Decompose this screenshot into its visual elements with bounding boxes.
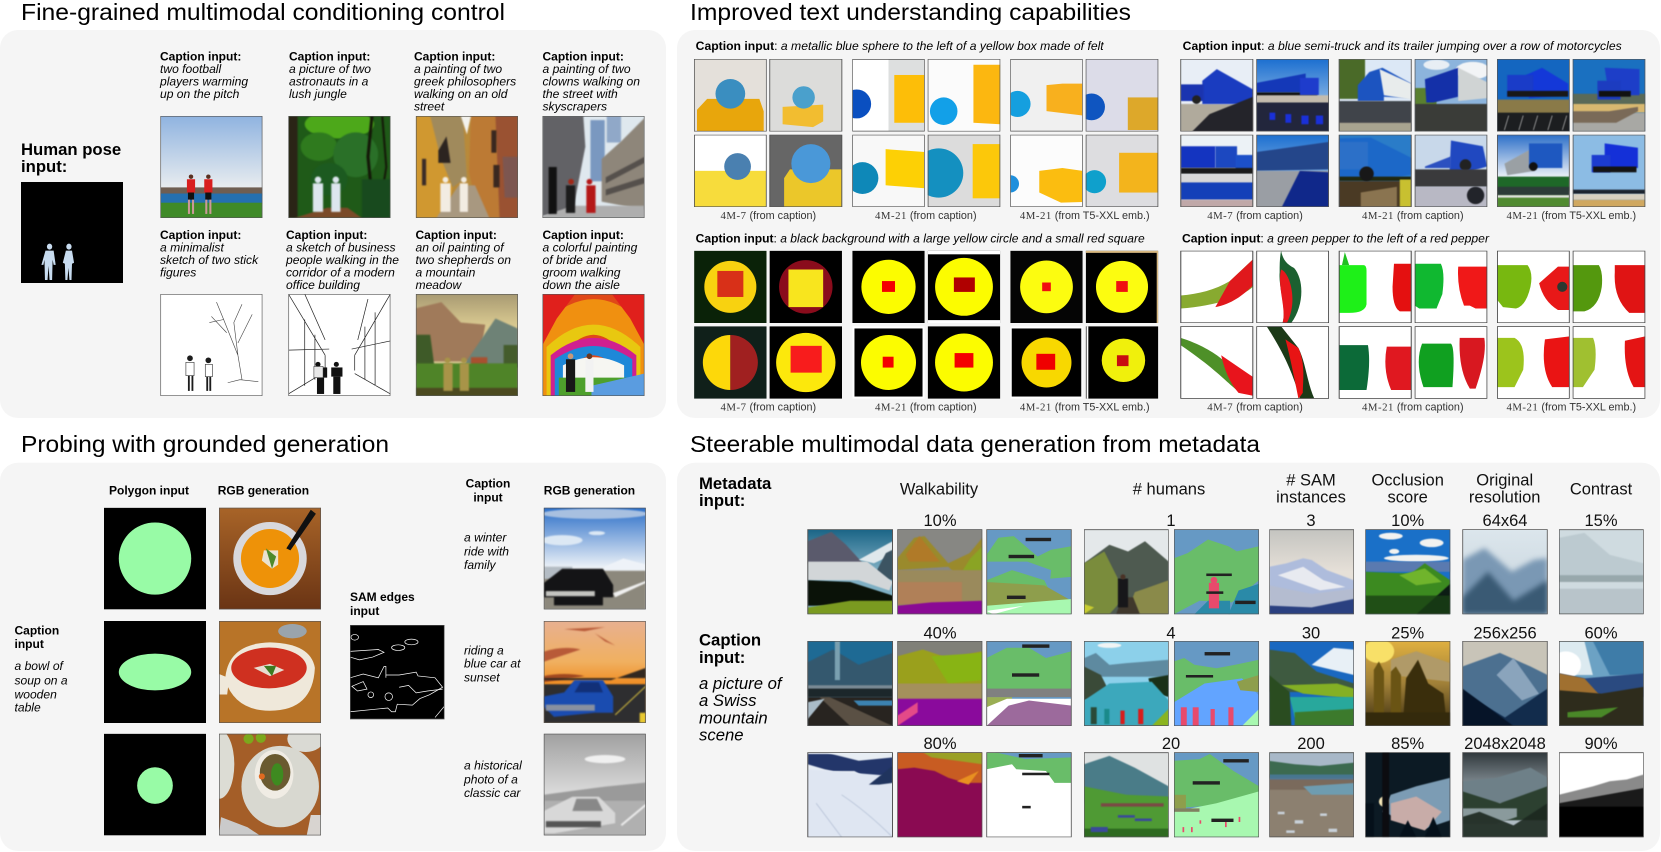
model labels, first row: 4M-21 (from T5-XXL emb.)	[1506, 210, 1636, 222]
heading: caption input right: Caption	[466, 477, 510, 491]
walkability 80% segmentation	[986, 752, 1072, 837]
column headers: Walkability	[900, 480, 979, 498]
caption text: riding at sunset: riding a	[464, 643, 504, 657]
values row 1: 15%	[1584, 512, 1618, 530]
circle image 12	[1086, 326, 1158, 399]
caption: shepherds: two shepherds on	[416, 253, 511, 267]
values row 3: 90%	[1584, 735, 1618, 753]
pepper image 3	[1339, 251, 1411, 323]
circle image 1	[694, 250, 766, 323]
sphere image 7	[694, 134, 767, 207]
title: steerable generation: Steerable multimodal data generation from metadata	[690, 431, 1261, 457]
sphere image 4	[928, 59, 1000, 132]
caption text: bowl of soup: soup on a	[14, 673, 68, 687]
sphere image 1	[694, 59, 767, 132]
caption text: Swiss mountain: mountain	[699, 708, 768, 727]
caption: clowns: skyscrapers	[542, 100, 607, 114]
caption: philosophers: a painting of two	[414, 62, 502, 76]
caption: astronauts: astronauts in a	[289, 74, 369, 88]
caption text: bowl of soup: wooden	[14, 687, 57, 701]
truck image 3	[1338, 59, 1412, 132]
truck image 11	[1497, 135, 1570, 207]
caption: football: up on the pitch	[160, 87, 240, 101]
caption text: Swiss mountain: scene	[699, 726, 744, 745]
caption: clowns: a painting of two	[542, 62, 631, 76]
caption: peppers: Caption input: a green pepper to the left of a red pepper	[1182, 232, 1490, 246]
column headers: resolution	[1469, 488, 1540, 506]
heading: SAM edges input: SAM edges	[350, 590, 415, 604]
walkability 80% normals	[897, 752, 982, 837]
caption: business people: a sketch of business	[286, 240, 396, 254]
values row 2	[923, 624, 1618, 642]
values row 2: 256x256	[1473, 624, 1537, 642]
truck image 8	[1256, 135, 1329, 207]
occlusion 10%	[1365, 529, 1450, 614]
model labels, first row: 4M-21 (from T5-XXL emb.)	[1020, 210, 1150, 222]
humans 4 segmentation	[1174, 641, 1259, 726]
caption: bride and groom: Caption input:	[542, 228, 624, 242]
caption: stick figures: Caption input:	[160, 228, 241, 242]
caption: semi-truck: Caption input: a blue semi-truck and its trailer jumping over a row of motorcycles	[1183, 39, 1622, 53]
image grid: blue trucks and motorcycles	[1181, 59, 1645, 207]
caption: bride and groom: down the aisle	[542, 278, 620, 292]
caption: business people: office building	[286, 278, 360, 292]
image: stick figure sketch	[160, 294, 262, 396]
sphere image 2	[769, 59, 842, 132]
circle image 11	[1010, 326, 1082, 398]
heading: RGB generation left: RGB generation	[218, 483, 309, 497]
model labels, first row: 4M-21 (from caption)	[875, 210, 977, 222]
sphere image 11	[1010, 134, 1083, 207]
image: corridor sketch	[288, 294, 390, 396]
values row 3: 2048x2048	[1464, 735, 1546, 753]
sphere image 6	[1086, 59, 1158, 132]
SAM 200 instances	[1269, 752, 1354, 837]
walkability 10% segmentation	[986, 529, 1072, 614]
model labels, second row	[720, 402, 1636, 414]
caption text: historical photo: photo of a	[463, 772, 518, 786]
circle image 8	[770, 326, 842, 399]
truck image 10	[1415, 135, 1487, 207]
truck image 5	[1497, 59, 1570, 132]
truck image 7	[1180, 134, 1254, 207]
pepper image 9	[1339, 326, 1411, 399]
values row 1: 10%	[1391, 512, 1425, 530]
humans 1 RGB	[1084, 529, 1169, 614]
resolution 64x64	[1462, 529, 1548, 614]
caption: shepherds: Caption input:	[416, 228, 497, 242]
image: human pose input	[21, 182, 123, 283]
human pose label: Human pose	[21, 140, 121, 159]
model labels, second row: 4M-7 (from caption)	[1207, 402, 1303, 414]
occlusion 25%	[1364, 639, 1450, 726]
humans 1 segmentation	[1174, 529, 1259, 614]
column headers: Occlusion	[1371, 472, 1444, 490]
values row 3: 200	[1297, 735, 1325, 753]
walkability 40% segmentation	[986, 641, 1072, 726]
heading: polygon input: Polygon input	[109, 483, 189, 497]
circle image 6	[1086, 250, 1158, 323]
image: philosophers on old street	[416, 116, 518, 218]
values row 3	[923, 735, 1618, 753]
column headers	[900, 472, 1633, 506]
values row 3: 20	[1162, 735, 1180, 753]
image: polygon wide ellipse	[104, 621, 206, 723]
caption: stick figures: figures	[160, 266, 196, 280]
caption: business people: people walking in the	[285, 253, 399, 267]
image group: walkability	[808, 529, 1072, 837]
column headers: Contrast	[1570, 480, 1633, 498]
image group: SAM instances	[1269, 529, 1354, 837]
image: black car winter	[542, 508, 648, 609]
caption input label: input:	[699, 648, 745, 667]
truck image 2	[1256, 59, 1329, 132]
circle image 3	[852, 250, 925, 323]
caption text: bowl of soup: table	[14, 701, 41, 715]
caption: clowns: Caption input:	[542, 50, 624, 64]
values row 1: 10%	[923, 512, 957, 530]
contrast 15%	[1559, 529, 1644, 614]
model labels, second row: 4M-7 (from caption)	[720, 402, 816, 414]
caption: astronauts: a picture of two	[289, 62, 371, 76]
pepper image 6	[1573, 251, 1645, 323]
SAM 30 instances	[1269, 641, 1354, 726]
heading: SAM edges input: input	[350, 604, 379, 618]
image: shepherds in meadow	[416, 294, 518, 396]
sphere image 9	[852, 134, 925, 207]
walkability 40% RGB	[808, 641, 893, 726]
caption text: winter ride: a winter	[464, 531, 507, 545]
image grid: yellow circles and red squares	[694, 251, 1158, 399]
panel: improved text understanding capabilities	[677, 30, 1660, 418]
panel: fine-grained multimodal conditioning control	[0, 30, 666, 418]
values row 1: 1	[1166, 512, 1176, 530]
values row 2: 30	[1302, 624, 1320, 642]
heading: caption input left: input	[14, 637, 44, 651]
model labels, second row: 4M-21 (from caption)	[875, 402, 977, 414]
pepper image 2	[1256, 251, 1329, 323]
sphere image 3	[852, 59, 925, 132]
image: SAM edges input	[350, 625, 444, 719]
pepper image 12	[1573, 326, 1645, 399]
image grid: spheres and boxes	[694, 59, 1158, 207]
resolution 2048x2048	[1462, 752, 1548, 837]
circle image 4	[928, 250, 1000, 323]
circle image 7	[694, 326, 767, 399]
caption text: winter ride: ride with	[464, 545, 509, 559]
column headers: Original	[1476, 472, 1533, 490]
panel: probing with grounded generation	[0, 463, 666, 851]
image: football players	[160, 116, 262, 218]
caption text: bowl of soup: a bowl of	[14, 659, 65, 673]
image: astronauts in jungle	[288, 116, 390, 218]
truck image 4	[1414, 59, 1488, 132]
human pose label: input:	[21, 157, 67, 176]
caption: shepherds: an oil painting of	[416, 240, 505, 254]
model labels, first row: 4M-7 (from caption)	[720, 210, 816, 222]
image group: contrast	[1551, 529, 1644, 837]
column headers: instances	[1276, 488, 1346, 506]
caption: shepherds: a mountain	[416, 266, 476, 280]
caption: business people: Caption input:	[286, 228, 367, 242]
panel: steerable multimodal data generation from metadata	[677, 463, 1660, 851]
caption: philosophers: Caption input:	[414, 50, 495, 64]
column headers: # SAM	[1286, 472, 1336, 490]
values row 1: 64x64	[1483, 512, 1527, 530]
image: blue car sunset	[544, 621, 646, 723]
pepper image 8	[1256, 326, 1329, 399]
resolution 256x256	[1462, 641, 1548, 726]
truck image 12	[1573, 135, 1645, 207]
contrast 90%	[1559, 752, 1644, 837]
humans 4 RGB	[1084, 641, 1169, 726]
model labels, first row: 4M-7 (from caption)	[1207, 210, 1303, 222]
caption: football: two football	[160, 62, 221, 76]
circle image 5	[1010, 250, 1083, 323]
caption text: Swiss mountain: a picture of	[699, 674, 784, 693]
values row 2: 60%	[1584, 624, 1618, 642]
circle image 2	[770, 250, 842, 323]
model labels, second row: 4M-21 (from T5-XXL emb.)	[1020, 402, 1150, 414]
walkability 10% RGB	[808, 529, 893, 614]
model labels, first row: 4M-21 (from caption)	[1362, 210, 1464, 222]
image: soup with plates	[204, 726, 324, 835]
image: rainbow arch bride and groom	[542, 294, 644, 396]
caption: clowns: the street with	[542, 87, 618, 101]
caption: clowns: clowns walking on	[542, 74, 640, 88]
image group: number of humans	[1084, 529, 1259, 837]
caption: philosophers: walking on an old	[414, 87, 509, 101]
sphere image 10	[928, 134, 1000, 207]
caption: bride and groom: of bride and	[542, 253, 608, 267]
truck image 1	[1180, 59, 1254, 132]
metadata input label: input:	[699, 491, 745, 510]
caption: blue sphere: Caption input: a metallic blue sphere to the left of a yellow box made of felt	[696, 39, 1104, 53]
caption text: riding at sunset: sunset	[464, 671, 500, 685]
values row 2: 4	[1166, 624, 1176, 642]
image: red soup bowl	[219, 621, 321, 723]
pepper image 11	[1497, 326, 1570, 399]
column headers: score	[1388, 488, 1428, 506]
caption input label: Caption	[699, 631, 761, 650]
image: clowns on skyscraper street	[542, 116, 644, 218]
values row 2: 25%	[1391, 624, 1425, 642]
image: historical car	[544, 734, 646, 835]
walkability 40% normals	[897, 641, 982, 726]
heading: caption input left: Caption	[14, 623, 59, 637]
heading: caption input right: input	[473, 491, 503, 505]
pepper image 10	[1415, 326, 1487, 399]
caption text: Swiss mountain: a Swiss	[699, 691, 756, 710]
image: polygon large ellipse	[104, 508, 206, 609]
pepper image 7	[1181, 326, 1253, 399]
caption: bride and groom: groom walking	[542, 266, 621, 280]
truck image 6	[1572, 59, 1646, 132]
sphere image 12	[1086, 134, 1158, 207]
values row 3: 85%	[1391, 735, 1425, 753]
caption: philosophers: street	[414, 100, 445, 114]
sphere image 5	[1010, 59, 1083, 132]
walkability 80% RGB	[808, 752, 893, 837]
image: orange soup	[219, 508, 321, 609]
circle image 9	[852, 326, 924, 398]
caption: stick figures: a minimalist	[160, 240, 224, 254]
caption: yellow circle: Caption input: a black background with a large yellow circle and a small red square	[696, 232, 1145, 246]
image grid: green and red peppers	[1181, 251, 1645, 399]
values row 1	[923, 512, 1618, 530]
caption: shepherds: meadow	[416, 278, 462, 292]
caption: football: players warming	[159, 74, 248, 88]
image group: original resolution	[1462, 529, 1548, 837]
heading: RGB generation right: RGB generation	[544, 483, 635, 497]
pepper image 1	[1181, 251, 1253, 323]
caption text: riding at sunset: blue car at	[464, 657, 521, 671]
caption: bride and groom: a colorful painting	[542, 240, 638, 254]
caption text: historical photo: a historical	[464, 759, 522, 773]
values row 1: 3	[1306, 512, 1316, 530]
humans 20 RGB	[1084, 752, 1169, 837]
caption: astronauts: Caption input:	[289, 50, 370, 64]
model labels, first row	[720, 210, 1636, 222]
caption: astronauts: lush jungle	[289, 87, 347, 101]
model labels, second row: 4M-21 (from T5-XXL emb.)	[1506, 402, 1636, 414]
caption: philosophers: greek philosophers	[414, 74, 516, 88]
circle image 10	[928, 326, 1000, 399]
caption: stick figures: sketch of two stick	[160, 253, 259, 267]
values row 2: 40%	[923, 624, 957, 642]
model labels, second row: 4M-21 (from caption)	[1362, 402, 1464, 414]
contrast 60%	[1551, 641, 1644, 726]
caption: business people: corridor of a modern	[286, 266, 395, 280]
values row 3: 80%	[923, 735, 957, 753]
truck image 9	[1339, 135, 1411, 207]
sphere image 8	[769, 134, 842, 207]
caption text: historical photo: classic car	[464, 786, 521, 800]
column headers: # humans	[1133, 480, 1205, 498]
image group: occlusion score	[1364, 529, 1450, 837]
metadata input label: Metadata	[699, 474, 772, 493]
title: grounded generation: Probing with grounded generation	[21, 431, 389, 457]
pepper image 5	[1497, 251, 1570, 323]
caption: football: Caption input:	[160, 50, 241, 64]
image: polygon small ellipse	[104, 734, 206, 835]
humans 20 segmentation	[1174, 752, 1259, 837]
walkability 10% normals	[897, 529, 982, 614]
SAM 3 instances	[1269, 529, 1354, 614]
pepper image 4	[1415, 251, 1487, 323]
occlusion 85%	[1365, 752, 1450, 837]
caption text: winter ride: family	[464, 558, 497, 572]
